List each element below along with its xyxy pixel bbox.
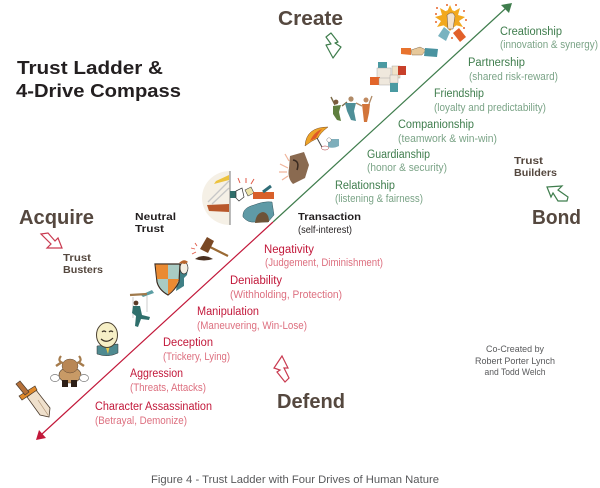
- rung: relationship: Relationship: [335, 180, 395, 192]
- rung: partnership: Partnership: [468, 57, 525, 69]
- icon: listening ear: [279, 152, 309, 184]
- rung: companionship: (teamwork & win-win): [398, 133, 497, 145]
- icon: bull: [50, 356, 88, 387]
- rung: guardianship: Guardianship: [367, 149, 430, 161]
- rung: companionship: [398, 119, 497, 145]
- icon: puppet: [130, 290, 154, 327]
- arrow: trust builders line: [273, 3, 512, 222]
- caption: Figure 4 - Trust Ladder with Four Drives of Human Nature: [151, 474, 439, 486]
- rung: deception: (Trickery, Lying): [163, 351, 230, 363]
- icon: gavel: [191, 237, 228, 260]
- icon: interlocked blocks: [370, 62, 406, 92]
- rung: relationship: (listening & fairness): [335, 193, 423, 205]
- credits: Robert Porter Lynch: [475, 356, 555, 367]
- title: [16, 57, 181, 101]
- rung: manipulation: Manipulation: [197, 306, 259, 318]
- rung: partnership: (shared risk-reward): [469, 71, 558, 83]
- red ladder labels: [95, 244, 383, 427]
- title: Trust Ladder &: [17, 57, 163, 78]
- rung: aggression: Aggression: [130, 368, 183, 380]
- rung: negativity: (Judgement, Diminishment): [265, 257, 383, 269]
- arrow: acquire drive: [41, 233, 62, 248]
- label: trust busters: [63, 253, 103, 276]
- rung: friendship: [434, 88, 546, 114]
- heading: Acquire: Acquire: [19, 207, 94, 229]
- rung: creationship: [500, 26, 598, 51]
- rung: guardianship: [367, 149, 447, 174]
- rung: partnership: [468, 57, 558, 83]
- icon: two-faced head: [96, 322, 118, 356]
- label: neutral trust: [135, 212, 176, 235]
- rung: negativity: [264, 244, 383, 269]
- rung: aggression: (Threats, Attacks): [130, 382, 206, 394]
- heading: Create: Create: [278, 8, 343, 30]
- icon: praying hands with sunburst: [435, 4, 467, 42]
- credits: and Todd Welch: [484, 367, 546, 378]
- label: trust busters: Busters: [63, 265, 103, 276]
- rung: friendship: (loyalty and predictability): [434, 102, 546, 114]
- label: trust busters: Trust: [63, 253, 92, 264]
- rung: character assassination: (Betrayal, Demonize): [95, 415, 187, 427]
- heading: Defend: Defend: [277, 391, 345, 413]
- rung: manipulation: (Maneuvering, Win-Lose): [197, 320, 307, 332]
- arrow: trust busters line: [36, 222, 273, 440]
- diagonal ladder axis: [36, 3, 512, 440]
- heading: Bond: Bond: [532, 207, 581, 229]
- title: 4-Drive Compass: [16, 80, 181, 101]
- rung: deception: [163, 337, 230, 363]
- rung: character assassination: Character Assassination: [95, 401, 212, 413]
- arrow: bond drive: [547, 186, 568, 201]
- rung: friendship: Friendship: [434, 88, 484, 100]
- rung: deniability: (Withholding, Protection): [230, 289, 342, 301]
- label: trust builders: Builders: [514, 168, 557, 179]
- green ladder labels: [335, 26, 598, 205]
- label: neutral trust: Trust: [135, 224, 165, 235]
- rung: deniability: Deniability: [230, 275, 282, 287]
- rung: companionship: Companionship: [398, 119, 474, 131]
- credits: Co-Created by: [486, 344, 544, 355]
- rung: transaction: [298, 212, 361, 236]
- rung: manipulation: [197, 306, 307, 332]
- icon: hand through window exchanging money: [202, 171, 274, 225]
- rung: transaction: (self-interest): [298, 225, 352, 236]
- rung: relationship: [335, 180, 423, 205]
- icon: dancing people: [331, 96, 372, 122]
- label: trust builders: Trust: [514, 156, 544, 167]
- icon: handshake: [401, 47, 438, 57]
- icon: sword: [16, 381, 50, 417]
- rung: negativity: Negativity: [264, 244, 314, 256]
- label: neutral trust: Neutral: [135, 212, 176, 223]
- rung: character assassination: [95, 401, 212, 427]
- rung: creationship: Creationship: [500, 26, 562, 38]
- credits: [475, 344, 555, 378]
- icon: shield with peeking figure: [155, 260, 188, 295]
- rung: deception: Deception: [163, 337, 213, 349]
- rung: aggression: [130, 368, 206, 394]
- rung: transaction: Transaction: [298, 212, 361, 223]
- rung: guardianship: (honor & security): [367, 162, 447, 174]
- rung: deniability: [230, 275, 342, 301]
- label: trust builders: [514, 156, 557, 179]
- arrow: create drive: [326, 33, 341, 58]
- icon: umbrella: [305, 127, 339, 150]
- arrow: defend drive: [274, 356, 289, 382]
